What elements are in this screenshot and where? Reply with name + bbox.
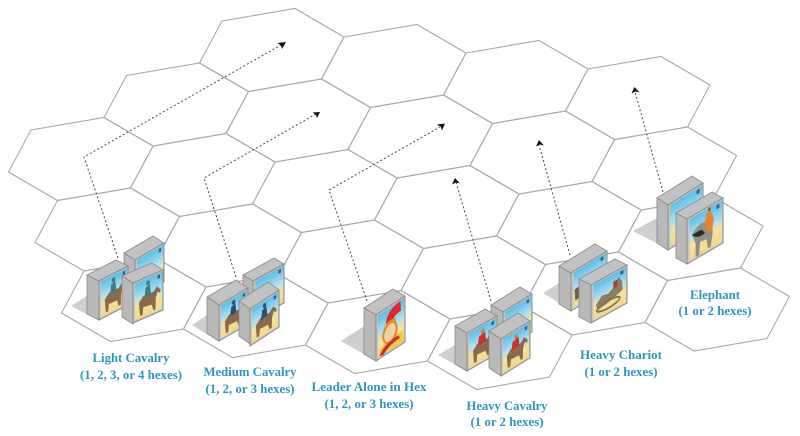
arrow: leader	[329, 124, 445, 301]
arrow: medium cavalry	[204, 112, 320, 277]
label: heavy chariot: Heavy Chariot	[580, 347, 663, 362]
arrow: light cavalry	[84, 42, 286, 258]
label: medium cavalry: Medium Cavalry	[204, 364, 297, 379]
label: elephant: (1 or 2 hexes)	[678, 303, 752, 318]
unit: light cavalry	[87, 236, 164, 324]
ground shadows	[71, 218, 670, 372]
label: elephant: Elephant	[690, 287, 741, 302]
label: heavy chariot: (1 or 2 hexes)	[584, 364, 658, 379]
label: medium cavalry: (1, 2, or 3 hexes)	[206, 381, 294, 396]
arrow: heavy chariot	[536, 140, 570, 255]
label: leader alone in hex: Leader Alone in Hex	[312, 379, 427, 394]
label: heavy cavalry: Heavy Cavalry	[466, 398, 548, 413]
unit: elephant	[657, 176, 723, 264]
label: heavy cavalry: (1 or 2 hexes)	[470, 414, 544, 429]
arrow: elephant	[632, 87, 663, 192]
unit: leader alone in hex	[364, 289, 405, 361]
label: light cavalry: (1, 2, 3, or 4 hexes)	[80, 367, 182, 382]
arrow: heavy cavalry	[452, 178, 491, 301]
unit: medium cavalry	[207, 258, 284, 346]
unit: heavy chariot	[559, 244, 627, 323]
movement arrows	[84, 42, 663, 301]
label: leader alone in hex: (1, 2, or 3 hexes)	[324, 396, 414, 411]
unit: heavy cavalry	[455, 287, 532, 376]
label: light cavalry: Light Cavalry	[92, 350, 170, 365]
